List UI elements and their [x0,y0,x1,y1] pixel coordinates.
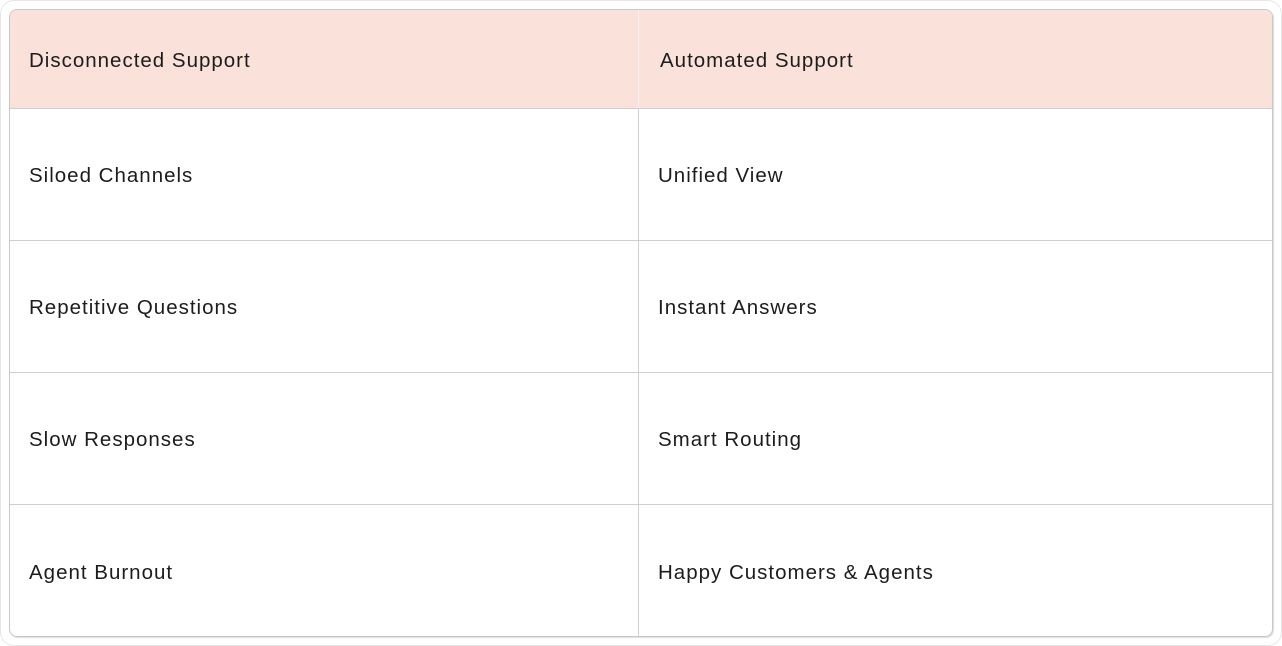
row 1 [10,109,1272,241]
header: disconnected support: Disconnected Support [29,48,251,72]
row 1: Unified View [658,164,784,187]
header: disconnected support [10,10,639,108]
row 4 [29,505,934,636]
header row [10,10,1272,109]
row 2: Repetitive Questions [29,296,238,319]
row 4: Agent Burnout [29,560,173,584]
row 3: Smart Routing [658,428,802,451]
header: automated support: Automated Support [660,48,854,72]
row 4: Happy Customers & Agents [658,560,934,584]
row 3: Slow Responses [29,428,196,451]
row 2 [10,241,1272,373]
row 2: Instant Answers [658,296,818,319]
row 1: Siloed Channels [29,164,193,187]
row 3 [10,373,1272,505]
